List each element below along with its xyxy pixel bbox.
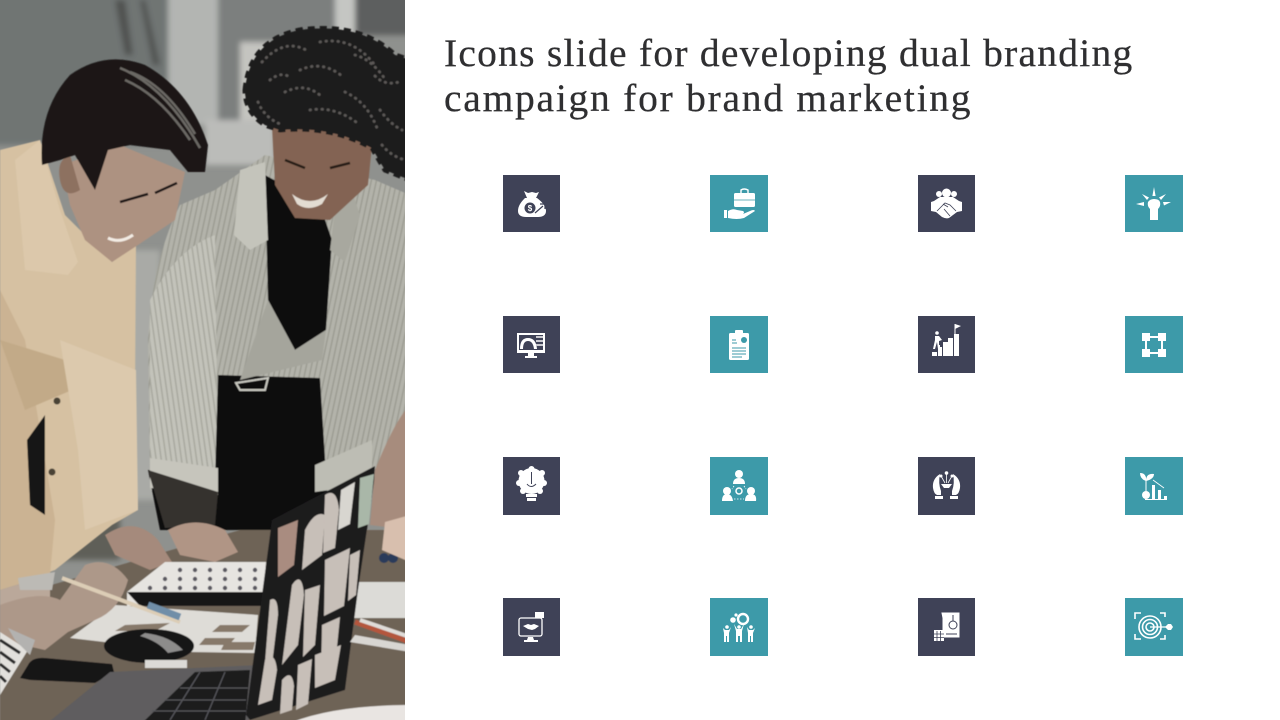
icon: three people around gear: [710, 457, 768, 515]
swatch sheet: [70, 605, 258, 653]
title: [444, 31, 1134, 120]
forearm and pen in foreground: [0, 562, 180, 650]
icon: gear lightbulb: [503, 457, 560, 515]
icon: money bag: [503, 175, 560, 232]
icon: team lifting gears: [710, 598, 768, 656]
icon: monitor with gauge: [503, 316, 560, 373]
table: [0, 405, 410, 720]
colour swatch board: [127, 562, 266, 606]
white paper at bottom: [285, 705, 410, 720]
title: campaign for brand marketing: [444, 76, 972, 120]
icon: hands holding network: [918, 457, 975, 515]
papers right of laptop: [352, 582, 410, 618]
icon: climbing steps to flag: [918, 316, 975, 373]
icon: clipboard certificate: [710, 316, 768, 373]
stickers on laptop base: [95, 660, 187, 698]
hands on table: [0, 522, 238, 612]
man: face: [59, 145, 185, 262]
icon: hand holding briefcase: [710, 175, 768, 232]
woman: face: [272, 122, 372, 220]
laptop keyboard base: [45, 665, 260, 720]
icon: fist with radiating arrows: [1125, 175, 1183, 232]
icon: document with gear and calendar: [918, 598, 975, 656]
mouse: [104, 629, 194, 663]
icon: plant with falling bar chart: [1125, 457, 1183, 515]
icon: group handshake: [918, 175, 975, 232]
title: Icons slide for developing dual branding: [444, 31, 1134, 75]
man: shirt and arm: [0, 140, 138, 590]
woman: curly hair: [245, 28, 410, 180]
icon: target with arrow: [1125, 598, 1183, 656]
icon: connected squares: [1125, 316, 1183, 373]
man: hair: [42, 59, 208, 190]
icon: monitor with handshake: [503, 598, 560, 656]
laptop screen with sticker collage: [246, 466, 375, 720]
phone: [20, 658, 114, 683]
markers on right of table: [350, 515, 410, 652]
photo: two colleagues reviewing colour swatches at a table: [0, 0, 405, 720]
woman: shirt, turtleneck, trousers: [148, 155, 410, 530]
icon: money bag: $: [528, 204, 533, 213]
striped sleeve and watch: [0, 572, 55, 695]
